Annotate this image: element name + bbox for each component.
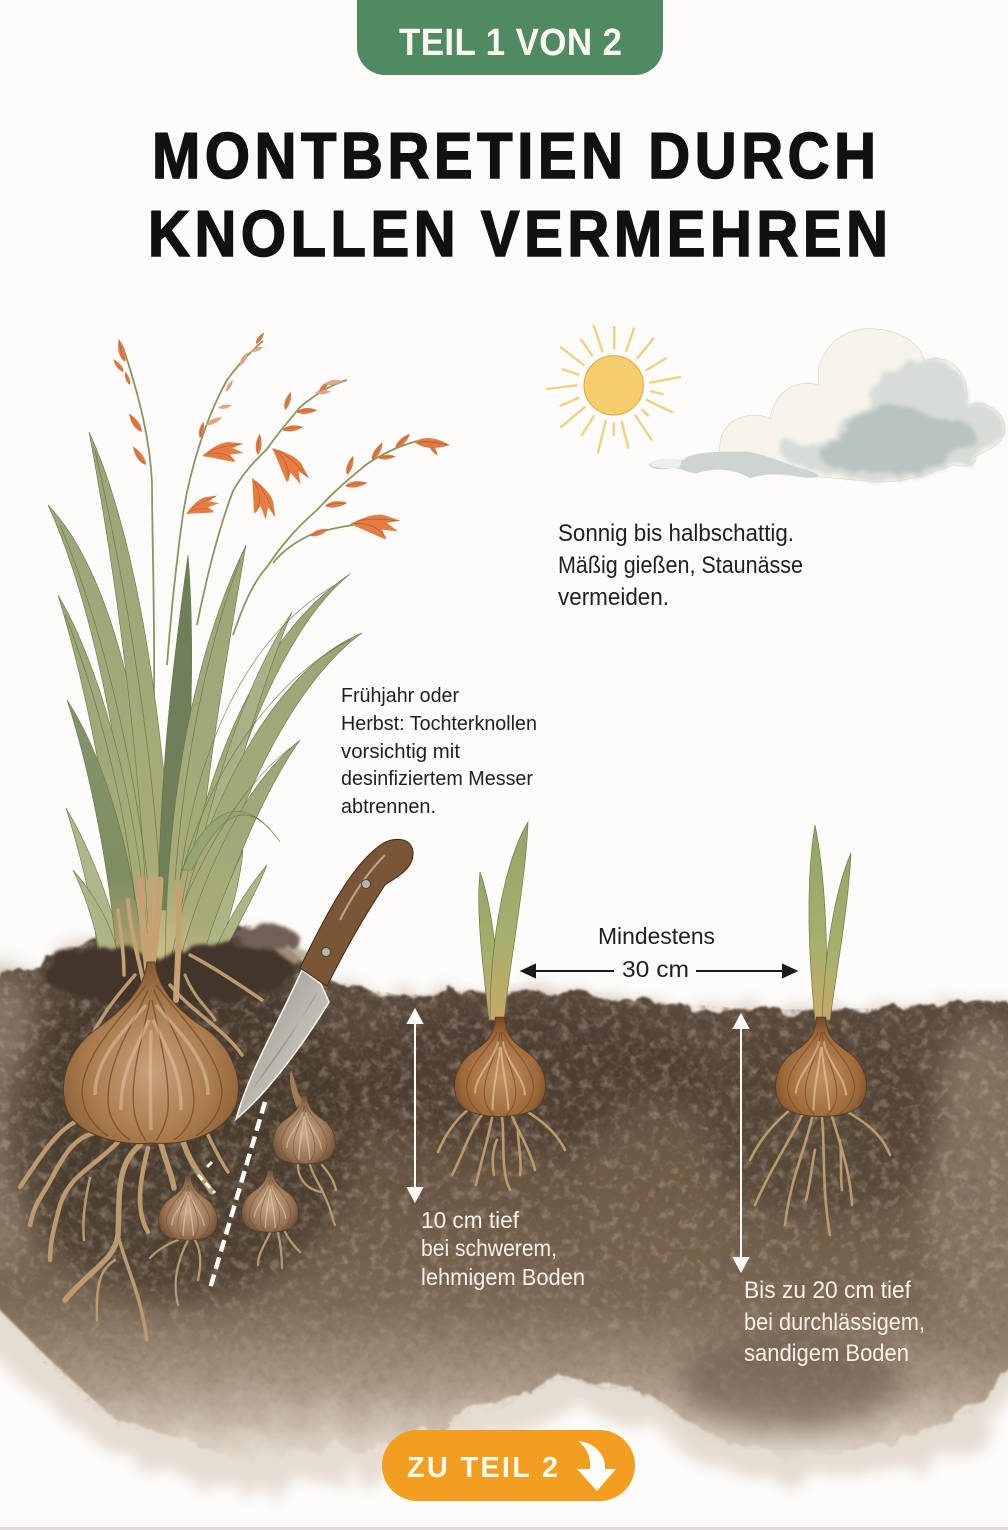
badge: Teil 1 von 2 [357, 0, 663, 75]
text block: heavy soil [421, 1207, 585, 1290]
plant: montbretia leaves and stems [43, 331, 450, 1005]
cut line: dashed [198, 1102, 265, 1292]
leaves [48, 432, 362, 975]
text block: sun and water: Sonnig bis halbschattig. [558, 520, 794, 547]
arrow: spacing left [522, 965, 614, 977]
text block: dividing instructions: abtrennen. [341, 795, 436, 818]
arrow: spacing right [696, 965, 796, 977]
text block: dividing instructions: Frühjahr oder [341, 684, 459, 707]
title: MONTBRETIEN DURCH [152, 120, 876, 193]
text block: sandy soil: sandigem Boden [744, 1340, 909, 1367]
text block: sun and water: Mäßig gießen, Staunässe [558, 552, 803, 579]
corm body [63, 962, 238, 1144]
soil cross-section [0, 920, 1008, 1495]
text block: dividing instructions [341, 684, 537, 818]
icon: knife [236, 839, 413, 1119]
soil mound over leaf bases [43, 944, 295, 1005]
arrow: 20 cm depth [734, 1015, 748, 1271]
text block: heavy soil: 10 cm tief [421, 1207, 520, 1233]
title: KNOLLEN VERMEHREN [148, 198, 888, 271]
title [148, 120, 888, 271]
roots [20, 955, 262, 1340]
dimension: spacing label and arrows [522, 923, 796, 982]
text block: sandy soil [744, 1277, 925, 1367]
text block: sun and water [558, 520, 803, 611]
mother corm with roots [20, 880, 262, 1340]
icon: cloud [648, 329, 1005, 482]
text block: sun and water: vermeiden. [558, 584, 669, 611]
daughter corms [150, 1070, 336, 1305]
icon: sun [547, 326, 680, 453]
dimension: spacing label and arrows: 30 cm [622, 956, 689, 982]
planted corm 2 [750, 825, 890, 1235]
badge: Teil 1 von 2: TEIL 1 VON 2 [399, 21, 622, 63]
text block: heavy soil: lehmigem Boden [421, 1264, 585, 1290]
text block: dividing instructions: vorsichtig mit [341, 740, 460, 763]
button: zu Teil 2 [382, 1430, 635, 1501]
leaf veins [60, 450, 350, 900]
text block: dividing instructions: desinfiziertem Messer [341, 767, 533, 790]
text block: dividing instructions: Herbst: Tochterknollen [341, 712, 537, 735]
text block: sandy soil: Bis zu 20 cm tief [744, 1277, 911, 1304]
button: zu Teil 2: ZU TEIL 2 [407, 1452, 558, 1484]
arrow: 10 cm depth [408, 1010, 422, 1201]
stems with buds and flowers [48, 331, 450, 975]
text block: heavy soil: bei schwerem, [421, 1235, 557, 1261]
dimension: spacing label and arrows: Mindestens [598, 923, 715, 949]
planted corm 1 [438, 822, 565, 1190]
icon: curved down arrow [577, 1441, 616, 1491]
neck fibres [118, 880, 179, 1000]
text block: sandy soil: bei durchlässigem, [744, 1309, 925, 1336]
